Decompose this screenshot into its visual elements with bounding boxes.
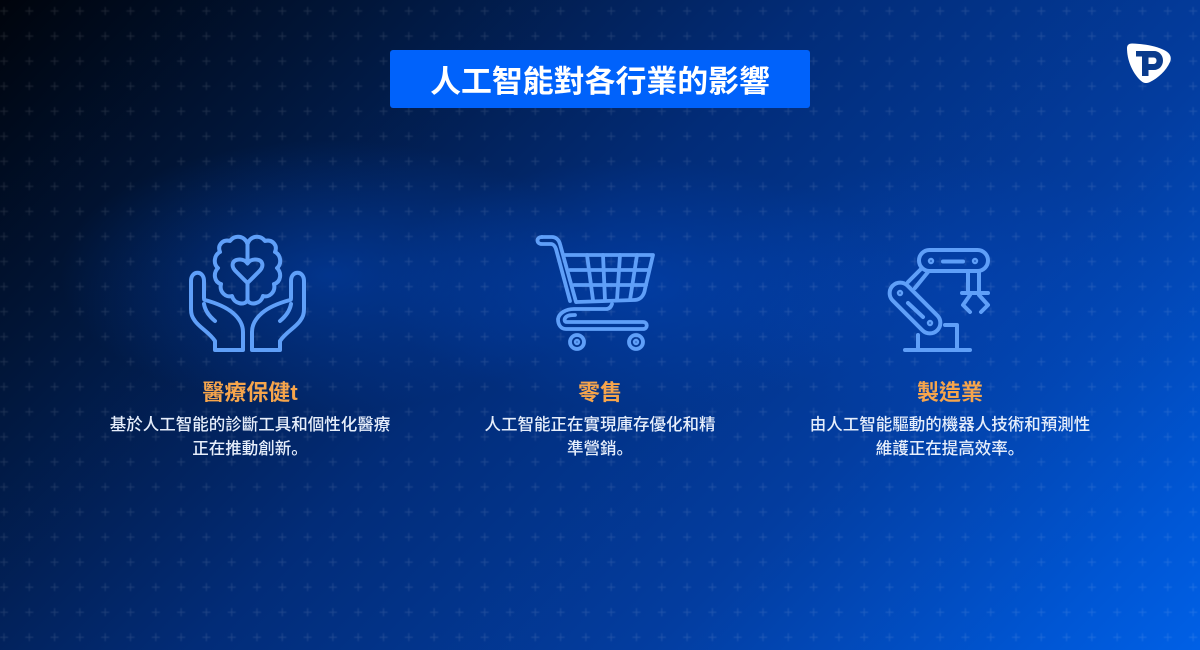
text: manufacturing description: [810, 416, 1090, 458]
text: retail description: 人工智能正在實現庫存優化和精: [484, 416, 716, 434]
text: healthcare description: 基於人工智能的診斷工具和個性化醫療: [110, 416, 390, 434]
heading: retail: 零售: [578, 380, 622, 405]
panel: healthcare: [110, 234, 390, 458]
text: manufacturing description: 維護正在提高效率。: [876, 440, 1024, 458]
panel: manufacturing: [810, 248, 1090, 458]
icon: company logo: [1127, 44, 1171, 83]
text: healthcare description: 正在推動創新。: [192, 440, 308, 458]
text: retail description: [484, 416, 716, 458]
heading: healthcare: 醫療保健t: [202, 380, 298, 405]
heading: manufacturing: 製造業: [917, 380, 983, 405]
title banner: 人工智能對各行業的影響: [430, 64, 770, 99]
icon: robot arm: [888, 248, 990, 352]
icon: shopping cart: [536, 235, 655, 351]
panel: retail: [484, 235, 716, 458]
text: healthcare description: [110, 416, 390, 458]
icon: brain held by hands: [189, 234, 306, 352]
text: manufacturing description: 由人工智能驅動的機器人技術和預測性: [810, 416, 1090, 434]
title banner: [390, 50, 810, 108]
text: retail description: 準營銷。: [567, 440, 633, 458]
